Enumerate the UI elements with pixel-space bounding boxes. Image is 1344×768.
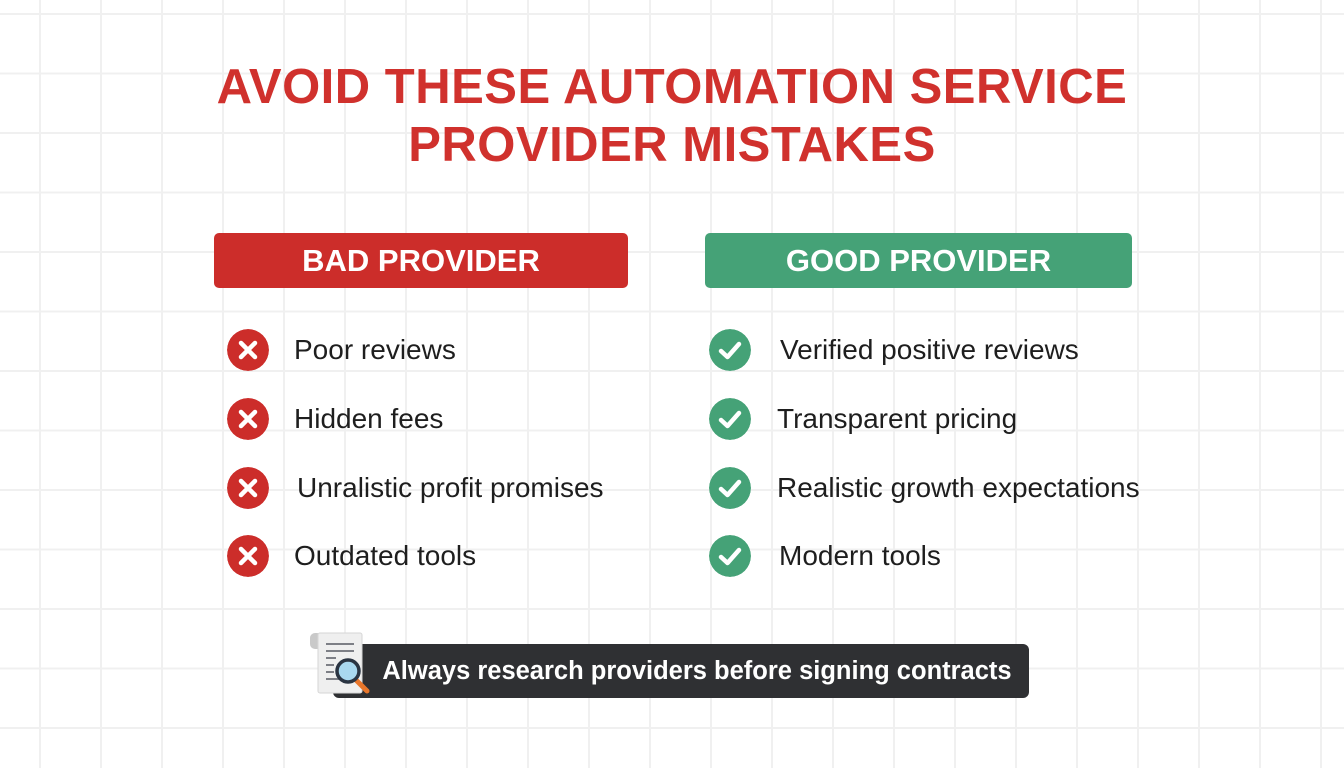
list: bad provider <box>227 329 604 577</box>
item: realistic growth: Realistic growth expectations <box>777 472 1140 503</box>
title: PROVIDER MISTAKES <box>408 118 936 172</box>
item: verified reviews: Verified positive reviews <box>780 334 1079 365</box>
item: outdated tools: Outdated tools <box>294 540 476 571</box>
title: AVOID THESE AUTOMATION SERVICE <box>217 60 1127 114</box>
header: good provider <box>705 233 1132 288</box>
item: transparent pricing: Transparent pricing <box>777 403 1017 434</box>
item: modern tools: Modern tools <box>779 540 941 571</box>
list: good provider <box>709 329 1140 577</box>
item: modern tools <box>709 535 941 577</box>
header: bad provider: BAD PROVIDER <box>302 243 540 278</box>
item: transparent pricing <box>709 398 1017 440</box>
item: verified reviews <box>709 329 1079 371</box>
item: outdated tools <box>227 535 476 577</box>
item: poor reviews <box>227 329 456 371</box>
callout bar <box>333 644 1029 698</box>
item: realistic growth <box>709 467 1140 509</box>
item: hidden fees: Hidden fees <box>294 403 443 434</box>
callout bar: Always research providers before signing contracts <box>382 657 1012 685</box>
item: unrealistic promises <box>227 467 604 509</box>
callout: research tip <box>310 632 1029 698</box>
title <box>217 60 1127 172</box>
header: good provider: GOOD PROVIDER <box>786 243 1051 278</box>
item: unrealistic promises: Unralistic profit promises <box>297 472 604 503</box>
item: hidden fees <box>227 398 443 440</box>
item: poor reviews: Poor reviews <box>294 334 456 365</box>
icon: document with magnifier <box>310 632 370 694</box>
header: bad provider <box>214 233 628 288</box>
